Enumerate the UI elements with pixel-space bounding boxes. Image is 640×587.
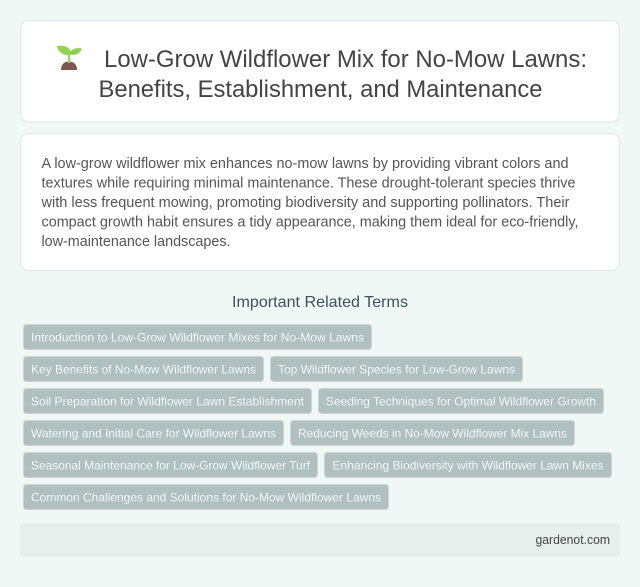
text block: description: textures while requiring minimal maintenance. These drought-tolerant species thrive xyxy=(42,174,576,192)
tag: seasonal maintenance xyxy=(24,452,318,478)
text block: description: A low-grow wildflower mix enhances no-mow lawns by providing vibrant colors and xyxy=(42,155,568,172)
tag: enhancing biodiversity: Enhancing Biodiversity with Wildflower Lawn Mixes xyxy=(332,458,604,472)
text block: description: low-maintenance landscapes. xyxy=(42,233,230,250)
tag: introduction: Introduction to Low-Grow Wildflower Mixes for No-Mow Lawns xyxy=(31,330,364,344)
title: Low-Grow Wildflower Mix for No-Mow Lawns: xyxy=(104,46,587,73)
text block: description xyxy=(41,155,578,250)
tag: seeding techniques: Seeding Techniques for Optimal Wildflower Growth xyxy=(326,394,596,408)
tag: seasonal maintenance: Seasonal Maintenance for Low-Grow Wildflower Turf xyxy=(31,458,311,472)
tag: introduction xyxy=(24,324,372,350)
icon: sprout xyxy=(57,46,82,70)
tag: common challenges xyxy=(24,484,388,510)
tag: watering xyxy=(24,420,284,446)
tag: key benefits xyxy=(24,356,264,382)
panel: description xyxy=(20,134,620,270)
tag: watering: Watering and Initial Care for Wildflower Lawns xyxy=(31,426,276,440)
tag: enhancing biodiversity xyxy=(324,452,612,478)
tag: soil preparation: Soil Preparation for Wildflower Lawn Establishment xyxy=(31,394,305,408)
panel: related term tags xyxy=(24,324,612,510)
tag: seeding techniques xyxy=(318,388,604,414)
tag: top species: Top Wildflower Species for Low-Grow Lawns xyxy=(278,362,515,376)
tag: key benefits: Key Benefits of No-Mow Wildflower Lawns xyxy=(31,362,256,376)
tag: common challenges: Common Challenges and Solutions for No-Mow Wildflower Lawns xyxy=(31,490,381,504)
panel: title card xyxy=(20,20,620,122)
tag: top species xyxy=(270,356,522,382)
tag: reducing weeds: Reducing Weeds in No-Mow Wildflower Mix Lawns xyxy=(298,426,567,440)
title: Benefits, Establishment, and Maintenance xyxy=(98,76,542,103)
footer source text: gardenot.com xyxy=(536,532,610,547)
tag: reducing weeds xyxy=(290,420,574,446)
text block: description: with less frequent mowing, promoting biodiversity and supporting pollinators. Their xyxy=(41,194,569,211)
heading: related terms: Important Related Terms xyxy=(232,294,408,311)
footer xyxy=(20,523,620,557)
title xyxy=(98,46,587,103)
tag: soil preparation xyxy=(24,388,312,414)
text block: description: compact growth habit ensures a tidy appearance, making them ideal for eco-friendly, xyxy=(42,214,578,230)
